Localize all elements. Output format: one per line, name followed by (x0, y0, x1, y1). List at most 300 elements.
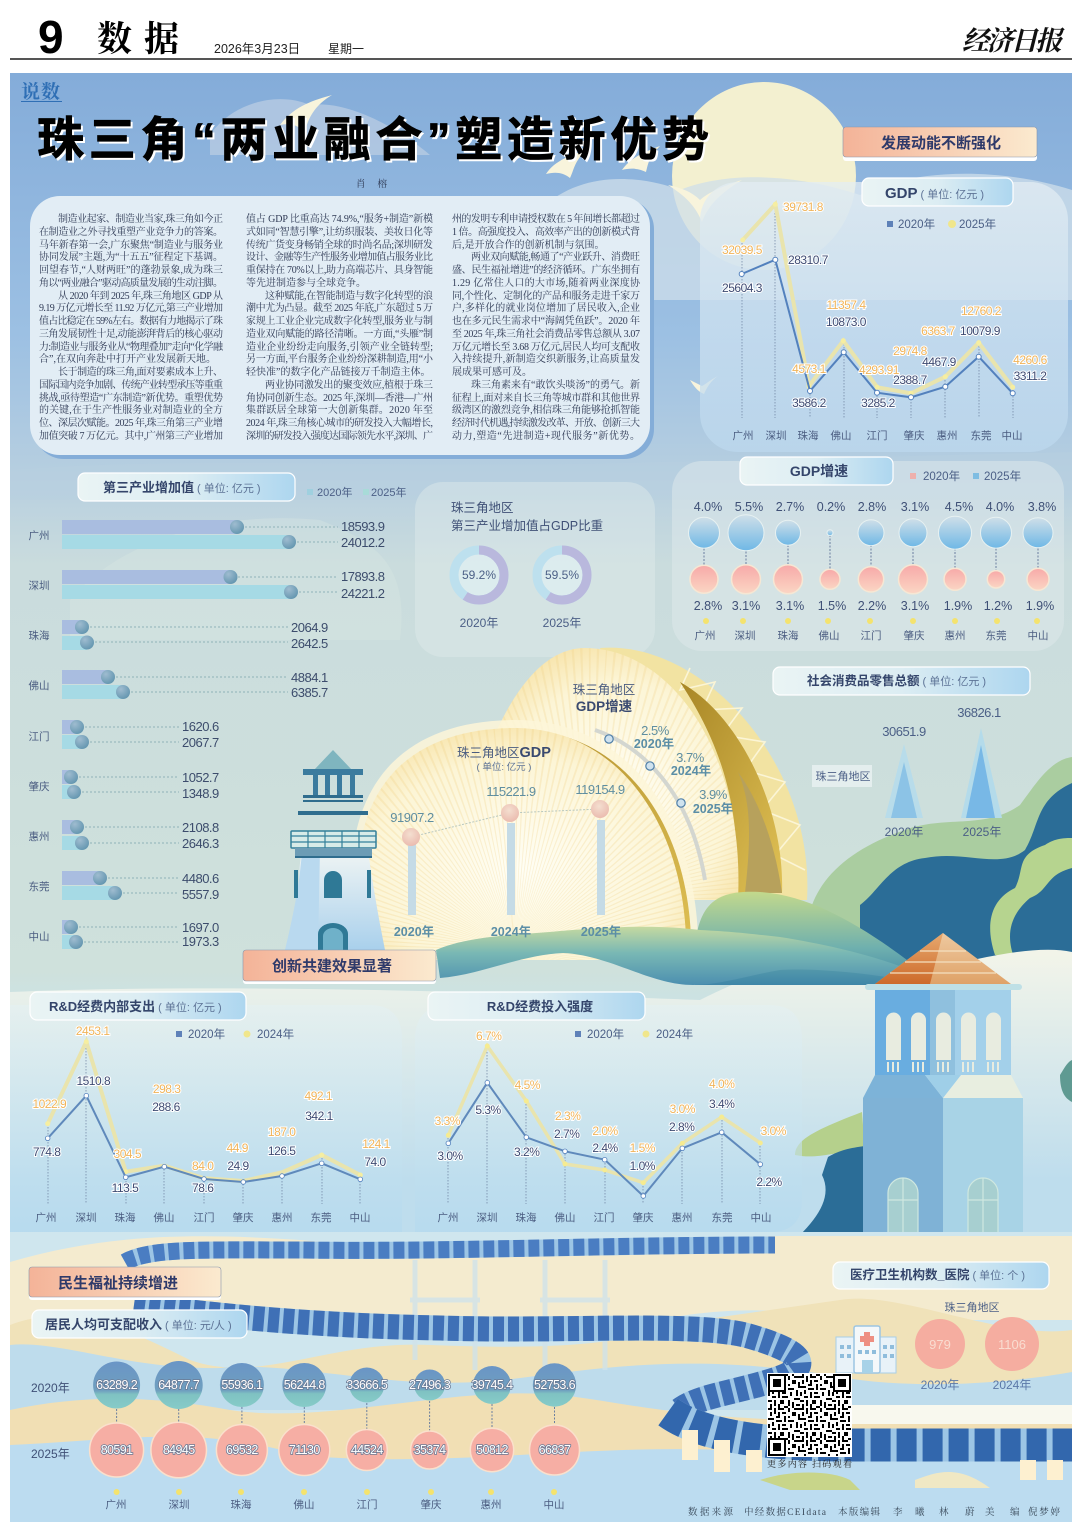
regional growth heading: GDP增速 (576, 698, 633, 714)
section heading: development momentum: 发展动能不断强化 (881, 134, 1001, 152)
income 2025 values: 69532 (226, 1443, 258, 1457)
R&D intensity 2024 values: 3.3% (435, 1114, 461, 1128)
text column 2: 造业双向赋能的路径清晰。一方面,“头雁”制 (246, 327, 433, 340)
text column 3: 动力,塑造“先进制造+现代服务”新优势。 (452, 429, 640, 442)
GDP 2020 line (739, 257, 1015, 400)
growth legend: 2020年 (923, 469, 960, 483)
tertiary city labels: 广州 (28, 530, 50, 542)
chart: retail sales (773, 667, 1030, 839)
R&D expenditure 2024 line (45, 1039, 363, 1181)
text column 1: 从 2020 年到 2025 年,珠三角地区 GDP 从 (58, 289, 223, 302)
text column 2 (246, 212, 434, 442)
section heading: innovation: 创新共建效果显著 (272, 957, 392, 975)
growth 2020 values: 3.1% (732, 599, 760, 613)
credits: 中经数据CEIdata (744, 1506, 827, 1518)
R&D intensity 2024 values (435, 1029, 787, 1155)
growth 2025 values (694, 500, 1056, 514)
income 2025 values: 71130 (289, 1443, 320, 1457)
tertiary values: 17893.8 (341, 569, 385, 584)
tertiary 2025 bars (62, 535, 291, 949)
GDP 2025 values: 12760.2 (961, 304, 1002, 318)
scenery: sun and clouds (10, 82, 1072, 640)
credits: 数据来源 (688, 1506, 733, 1518)
R&D intensity city axis: 佛山 (554, 1211, 576, 1224)
regional growth values: 2025年 (693, 801, 733, 816)
tertiary values: 1697.0 (182, 920, 219, 935)
income row labels: 2025年 (31, 1447, 70, 1461)
growth 2020 values: 2.8% (694, 599, 722, 613)
hospitals heading: 医疗卫生机构数_医院 ( 单位: 个 ) (850, 1267, 1025, 1282)
R&D expenditure 2024 values: 44.9 (227, 1141, 249, 1155)
income 2025 bubbles (90, 1422, 579, 1478)
credits: 曦 (915, 1506, 925, 1518)
growth legend (910, 469, 1021, 483)
tertiary values: 2646.3 (182, 836, 219, 851)
retail cone 2025 (957, 705, 1002, 839)
text column 3: 也在多元民生需求中“海阔凭鱼跃”。2020 年 (452, 314, 640, 327)
R&D intensity city axis: 深圳 (476, 1212, 498, 1224)
regional GDP values: 119154.9 (575, 782, 625, 797)
R&D expenditure 2020 values: 24.9 (227, 1159, 250, 1173)
text column 2: 式如同“智慧引擎”,让纺织服装、美妆日化等 (246, 225, 433, 238)
tertiary city labels: 佛山 (28, 679, 50, 692)
tertiary values: 1620.6 (182, 719, 219, 734)
R&D intensity city axis: 珠海 (516, 1211, 537, 1224)
tertiary city labels: 惠州 (28, 830, 50, 843)
R&D expenditure city axis: 中山 (350, 1211, 370, 1224)
regional GDP balls (402, 800, 609, 846)
GDP 2020 values: 10079.9 (960, 324, 1001, 338)
income 2025 values: 44524 (351, 1443, 383, 1457)
donut 2025: 59.5% (545, 568, 579, 582)
growth city axis: 惠州 (944, 629, 966, 642)
R&D intensity 2020 values: 1.0% (630, 1159, 656, 1173)
masthead (10, 11, 1072, 63)
text column 2: 角协同创新生态。2025 年,深圳—香港—广州 (246, 391, 433, 404)
R&D intensity city axis: 惠州 (672, 1211, 692, 1224)
panel: GDP growth rate (672, 457, 1064, 651)
income 2020 values: 55936.1 (221, 1378, 263, 1392)
growth city axis: 珠海 (778, 629, 799, 642)
income city axis: 江门 (356, 1498, 378, 1511)
regional GDP heading: 珠三角地区GDP (457, 745, 551, 761)
income city axis: 中山 (544, 1498, 564, 1511)
growth 2025 values: 2.7% (776, 500, 804, 514)
tertiary values: 2108.8 (182, 820, 219, 835)
text column 2: 这种赋能,在智能制造与数字化转型的浪 (265, 289, 433, 302)
regional growth dots (605, 735, 685, 807)
regional growth values (634, 723, 733, 816)
R&D expenditure 2020 values: 288.6 (152, 1100, 181, 1114)
tertiary values: 4884.1 (291, 670, 328, 685)
income 2025 values: 66837 (539, 1443, 571, 1457)
R&D expenditure 2020 values (33, 1074, 387, 1195)
tertiary legend (307, 485, 406, 499)
text column 1: 的关键,在于生产性服务业对制造业的全方 (39, 403, 223, 416)
illustration: lighthouse (285, 750, 385, 952)
R&D intensity drop lines (448, 1046, 760, 1204)
weekday: 星期一 (328, 42, 364, 56)
bridge piers (690, 1430, 1055, 1480)
text column 2: 2024 年,珠三角核心城市的研发投入大幅增长, (246, 416, 433, 429)
share subtitle: 第三产业增加值占GDP比重 (451, 518, 603, 533)
R&D intensity 2020 values: 3.0% (437, 1149, 464, 1163)
R&D intensity legend (575, 1027, 693, 1041)
R&D expenditure 2024 values: 304.5 (114, 1147, 142, 1161)
heading: disposable income: 居民人均可支配收入 ( 单位: 元/人 ) (45, 1317, 232, 1332)
R&D expenditure heading: R&D经费内部支出 ( 单位: 亿元 ) (49, 999, 222, 1014)
growth city axis: 广州 (694, 630, 716, 642)
tertiary values: 1052.7 (182, 770, 219, 785)
chart: disposable income bubbles (31, 1361, 580, 1511)
newspaper logo: 经济日报 (962, 26, 1065, 56)
tertiary values: 2064.9 (291, 620, 328, 635)
GDP chart heading (862, 178, 1013, 206)
GDP 2025 values: 11357.4 (826, 298, 866, 312)
text column 1: 协同发展”主题,为“十五五”征程定下基调。 (39, 250, 223, 263)
R&D expenditure 2020 values: 78.6 (192, 1181, 214, 1195)
credits (688, 1506, 1060, 1518)
R&D intensity 2024 values: 2.3% (555, 1109, 581, 1123)
regional GDP years (394, 924, 621, 939)
regional growth values: 2.5% (641, 723, 670, 738)
income 2020 values: 63289.2 (96, 1378, 138, 1392)
GDP city axis: 惠州 (936, 429, 958, 442)
scenery: bottom sand and water (10, 1232, 1072, 1522)
GDP city axis: 佛山 (830, 429, 852, 442)
R&D expenditure city axis: 珠海 (114, 1211, 136, 1224)
icon: hospital building (836, 1326, 896, 1373)
income 2020 values (96, 1378, 576, 1392)
growth city axis: 东莞 (986, 629, 1006, 642)
R&D expenditure 2020 values: 342.1 (305, 1109, 334, 1123)
credits: 美 (985, 1506, 995, 1518)
regional GDP years: 2020年 (394, 924, 434, 939)
date: 2026年3月23日 (214, 42, 300, 56)
hospitals 2024 circle: 2024年 (993, 1378, 1031, 1392)
R&D expenditure 2020 values: 74.0 (364, 1155, 387, 1169)
R&D intensity city axis: 肇庆 (632, 1211, 654, 1224)
R&D expenditure 2024 values: 298.3 (153, 1082, 181, 1096)
GDP city axis: 中山 (1002, 429, 1022, 442)
income 2025 values: 35374 (414, 1443, 446, 1457)
text column 1: 加值突破 7 万亿元。其中,广州第三产业增加 (39, 429, 223, 442)
donut 2020 (454, 550, 504, 630)
tertiary values (182, 519, 385, 949)
panel: article text (30, 196, 654, 459)
R&D expenditure city axis: 东莞 (310, 1211, 332, 1224)
text column 2: 设计、金融等生产性服务业增加值占服务业比 (246, 250, 433, 263)
regional growth values: 3.9% (699, 787, 728, 802)
text column 2: 轻快准”的数字化产品链接万千制造主体。 (246, 365, 430, 378)
hospitals 2024 circle: 1106 (998, 1337, 1026, 1352)
GDP city axis: 肇庆 (904, 429, 925, 442)
tertiary city labels (28, 530, 50, 943)
R&D intensity 2020 values: 2.8% (669, 1120, 695, 1134)
tertiary values: 5557.9 (182, 887, 219, 902)
regional growth heading: 珠三角地区 (573, 683, 635, 697)
growth city markers (703, 618, 1040, 624)
hospitals 2020 circle: 979 (929, 1337, 951, 1352)
growth city axis (694, 629, 1048, 642)
text column 2: 集群跃居全球第一大创新集群。2020 年至 (246, 403, 433, 416)
GDP city axis: 东莞 (970, 429, 992, 442)
front dome halo (351, 720, 698, 960)
retail region tag (812, 765, 872, 787)
retail cone 2025: 36826.1 (957, 705, 1001, 720)
tertiary end balls (64, 520, 298, 949)
text column 1: 角以“两业融合”驱动高质量发展的生动注脚。 (39, 276, 223, 289)
donut 2025: 2025年 (543, 616, 581, 630)
income city axis: 广州 (106, 1499, 126, 1511)
text column 3: 珠三角素来有“敢饮头啖汤”的勇气。新 (471, 378, 640, 391)
R&D intensity 2020 values: 3.2% (514, 1145, 540, 1159)
retail cone 2025: 2025年 (963, 825, 1001, 839)
growth 2025 values: 4.5% (945, 500, 973, 514)
growth legend: 2025年 (984, 469, 1021, 483)
text column 3: 1 倍。高强度投入、高效率产出的创新模式背 (452, 225, 640, 238)
GDP 2020 values: 10873.0 (826, 315, 867, 329)
tertiary leader lines (79, 527, 338, 942)
text column 3: 1.29 亿常住人口的大市场,随着两业深度协 (452, 276, 641, 289)
income connectors (117, 1401, 554, 1431)
text column 2: 深圳的研发投入强度达国际领先水平,深圳、广 (246, 429, 433, 442)
GDP 2020 values: 3285.2 (861, 396, 896, 410)
bridge pylons (410, 1260, 610, 1370)
growth 2025 values: 5.5% (735, 500, 763, 514)
text column 2: 等先进制造参与全球竞争。 (246, 276, 366, 289)
R&D expenditure heading (30, 992, 246, 1020)
tertiary legend: 2025年 (371, 485, 406, 499)
growth connectors (704, 535, 1038, 572)
scenery: lower forest (795, 1060, 1072, 1235)
GDP 2025 values: 2974.8 (893, 344, 928, 358)
income 2025 values (101, 1443, 571, 1457)
text column 3: 经济时代机遇,持续激发改革、开放、创新三大 (452, 416, 640, 429)
text column 1: 国际国内竞争加剧、传统产业转型承压等重重 (39, 378, 223, 391)
panel: R&D intensity (415, 992, 802, 1232)
income 2025 values: 80591 (101, 1443, 133, 1457)
hospitals heading (833, 1262, 1049, 1289)
title: 珠三角“两业融合”塑造新优势 (37, 113, 709, 166)
income city axis: 肇庆 (420, 1498, 442, 1511)
icons: seagulls (280, 95, 742, 394)
text column 3: 两业双向赋能,畅通了“产业跃升、消费旺 (471, 250, 640, 263)
gold interior arch shadow (738, 772, 782, 893)
R&D intensity heading: R&D经费投入强度 (487, 999, 593, 1014)
tertiary values: 1348.9 (182, 786, 219, 801)
regional growth values: 2020年 (634, 736, 674, 751)
credits: 蔚 (965, 1506, 975, 1518)
chart: hospitals (833, 1262, 1049, 1392)
panel: R&D expenditure (10, 992, 402, 1232)
text column 3: 至 2025 年,珠三角社会消费品零售总额从 3.07 (452, 327, 640, 340)
growth 2020 values: 3.1% (776, 599, 804, 613)
growth 2020 values: 1.2% (984, 599, 1012, 613)
share heading: 珠三角地区 (451, 501, 514, 515)
retail heading: 社会消费品零售总额 ( 单位: 亿元 ) (807, 673, 986, 688)
tertiary city labels: 肇庆 (28, 780, 50, 793)
text column 1: 位、深层次赋能。2025 年,珠三角第三产业增 (39, 416, 223, 429)
illustration: bridge (125, 1245, 1072, 1480)
GDP 2020 values: 2388.7 (893, 373, 928, 387)
text column 2: 另一方面,平台服务企业纷纷深耕制造,用“小 (246, 352, 434, 365)
R&D expenditure legend: 2024年 (257, 1027, 294, 1041)
R&D intensity city axis (438, 1211, 772, 1224)
text column 3 (452, 212, 641, 442)
regional GDP values: 115221.9 (486, 784, 536, 799)
text column 1: 力:制造业与服务业从“物理叠加”走向“化学融 (39, 340, 224, 353)
income 2020 values: 27496.3 (409, 1378, 451, 1392)
R&D intensity 2020 values: 2.7% (554, 1127, 580, 1141)
R&D intensity 2020 line (446, 1080, 763, 1198)
text column 3: 同,个性化、定制化的产品和服务走进千家万 (452, 289, 640, 302)
text column 3: 后,是开放合作的创新机制与氛围。 (452, 238, 604, 251)
GDP city axis: 珠海 (798, 429, 819, 442)
GDP 2025 values (722, 200, 1048, 377)
R&D intensity 2020 values (437, 1097, 783, 1189)
income city axis: 珠海 (230, 1498, 252, 1511)
R&D intensity 2020 values: 2.2% (756, 1175, 783, 1189)
byline: 肖榕 (356, 178, 399, 190)
R&D expenditure city axis: 肇庆 (232, 1211, 254, 1224)
growth 2020 values: 3.1% (901, 599, 929, 613)
page number: 9 (38, 11, 64, 63)
rear dome (502, 648, 738, 900)
GDP 2025 values: 6363.7 (921, 324, 956, 338)
tertiary 2020 bars (62, 520, 237, 934)
R&D expenditure 2024 values: 187.0 (268, 1125, 296, 1139)
R&D intensity legend: 2024年 (656, 1027, 693, 1041)
regional growth values: 2024年 (671, 763, 711, 778)
rear lattice rim (600, 648, 807, 900)
income 2020 values: 56244.8 (284, 1378, 325, 1392)
R&D intensity legend: 2020年 (587, 1027, 624, 1041)
income 2020 values: 52753.6 (534, 1378, 576, 1392)
text column 3: 盛、民生福祉增进”的经济循环。广东坐拥有 (452, 263, 640, 276)
GDP 2025 values: 4573.1 (792, 362, 827, 376)
text column 3: 征程上,面对来自长三角等城市群和其他世界 (452, 391, 640, 404)
column label: 说数 (21, 81, 61, 103)
regional GDP values: 91907.2 (390, 810, 434, 825)
text column 3: 入持续提升,新制造交织新服务,让高质量发 (452, 352, 640, 365)
R&D expenditure 2024 values: 1022.9 (32, 1097, 67, 1111)
regional GDP heading: ( 单位: 亿元 ) (477, 761, 531, 773)
tertiary values: 2067.7 (182, 735, 219, 750)
GDP 2020 values (722, 253, 1047, 410)
growth city axis: 深圳 (734, 630, 756, 642)
retail cone 2020: 2020年 (885, 825, 923, 839)
income 2025 values: 50812 (476, 1443, 509, 1457)
R&D intensity 2020 values: 2.4% (592, 1141, 619, 1155)
growth circles 2025 (688, 515, 1053, 551)
illustration: tower (863, 933, 1023, 1235)
R&D expenditure city axis: 佛山 (154, 1211, 174, 1224)
GDP 2020 values: 25604.3 (722, 281, 763, 295)
text column 1: 回望春节,“人财两旺”的蓬勃景象,成为珠三 (39, 263, 223, 276)
R&D intensity city axis: 中山 (750, 1211, 772, 1224)
growth city axis: 肇庆 (904, 629, 925, 642)
illustration: front hills (436, 892, 907, 985)
R&D expenditure city axis (36, 1211, 370, 1224)
R&D expenditure 2024 values: 124.1 (362, 1137, 391, 1151)
R&D expenditure city axis: 江门 (194, 1211, 214, 1224)
text column 2: 重保持在 70%以上,助力高端芯片、具身智能 (246, 263, 433, 276)
section heading: innovation (243, 950, 436, 984)
growth 2020 values: 1.9% (944, 599, 972, 613)
GDP chart heading: GDP ( 单位: 亿元 ) (885, 185, 984, 202)
scenery: right forest hills (812, 757, 1072, 960)
growth 2025 values: 3.8% (1028, 500, 1056, 514)
R&D intensity 2024 values: 2.0% (592, 1124, 619, 1138)
GDP city axis: 深圳 (766, 430, 786, 442)
section heading: livelihood (29, 1267, 221, 1300)
QR caption: 更多内容 扫码观看 (767, 1458, 852, 1469)
tertiary values: 18593.9 (341, 519, 385, 534)
tertiary city labels: 江门 (28, 730, 50, 743)
R&D expenditure city axis: 广州 (36, 1212, 56, 1224)
income 2020 values: 39745.4 (472, 1378, 513, 1392)
donut 2020: 59.2% (462, 568, 496, 582)
retail region tag: 珠三角地区 (816, 769, 870, 783)
panel: GDP line chart (700, 178, 1068, 452)
income 2020 bubbles (93, 1361, 576, 1409)
growth 2020 values: 1.5% (818, 599, 846, 613)
text column 3: 万亿元增长至 3.68 万亿元,居民人均可支配收 (452, 340, 640, 353)
text column 2: 传统广货变身畅销全球的时尚名品;深圳研发 (246, 238, 433, 251)
bridge lower deck (668, 1412, 1072, 1445)
R&D expenditure 2024 values: 2453.1 (76, 1024, 110, 1038)
text column 1: 马年新春第一会,广东聚焦“制造业与服务业 (39, 238, 223, 251)
GDP city axis: 广州 (732, 430, 754, 442)
growth 2020 values (694, 599, 1054, 613)
tertiary values: 24221.2 (341, 586, 385, 601)
regional GDP years: 2025年 (581, 924, 621, 939)
R&D intensity 2024 values: 4.0% (709, 1077, 735, 1091)
section heading: livelihood: 民生福祉持续增进 (58, 1274, 178, 1292)
regional growth values: 3.7% (676, 750, 705, 765)
text column 2: 两业协同激发出的聚变效应,植根于珠三 (265, 378, 433, 391)
credits: 倪梦婷 (1028, 1506, 1060, 1518)
R&D intensity city axis: 东莞 (712, 1211, 732, 1224)
text column 1: 9.19 万亿元增长至 11.92 万亿元,第三产业增加 (39, 301, 223, 314)
R&D expenditure city axis: 深圳 (76, 1212, 96, 1224)
R&D intensity 2020 values: 3.4% (709, 1097, 735, 1111)
chart: tertiary industry bars (28, 473, 406, 949)
income row labels: 2020年 (31, 1381, 70, 1395)
front dome (364, 728, 686, 960)
tertiary values: 1973.3 (182, 934, 219, 949)
text column 1 (39, 212, 224, 442)
tertiary heading: 第三产业增加值 ( 单位: 亿元 ) (103, 480, 261, 495)
tertiary values: 4480.6 (182, 871, 219, 886)
bridge upper deck (125, 1245, 775, 1262)
front dome gold band (360, 730, 691, 960)
regional GDP heading (457, 745, 551, 773)
text column 3: 户,多样化的就业岗位增加了居民收入,企业 (452, 301, 640, 314)
income city axis: 惠州 (480, 1498, 502, 1511)
illustration: shell domes with regional GDP (356, 648, 808, 960)
donut 2025 (537, 550, 587, 630)
GDP 2020 values: 28310.7 (788, 253, 829, 267)
retail cone 2020: 30651.9 (882, 724, 926, 739)
text column 1: 挑战,亟待塑造“广东制造”新优势。重塑优势 (39, 391, 223, 404)
R&D expenditure 2024 values: 84.0 (192, 1159, 214, 1173)
growth circles 2020 (690, 565, 1049, 594)
R&D expenditure legend (176, 1027, 294, 1041)
R&D intensity 2024 values: 4.5% (515, 1078, 541, 1092)
regional GDP years: 2024年 (491, 924, 531, 939)
